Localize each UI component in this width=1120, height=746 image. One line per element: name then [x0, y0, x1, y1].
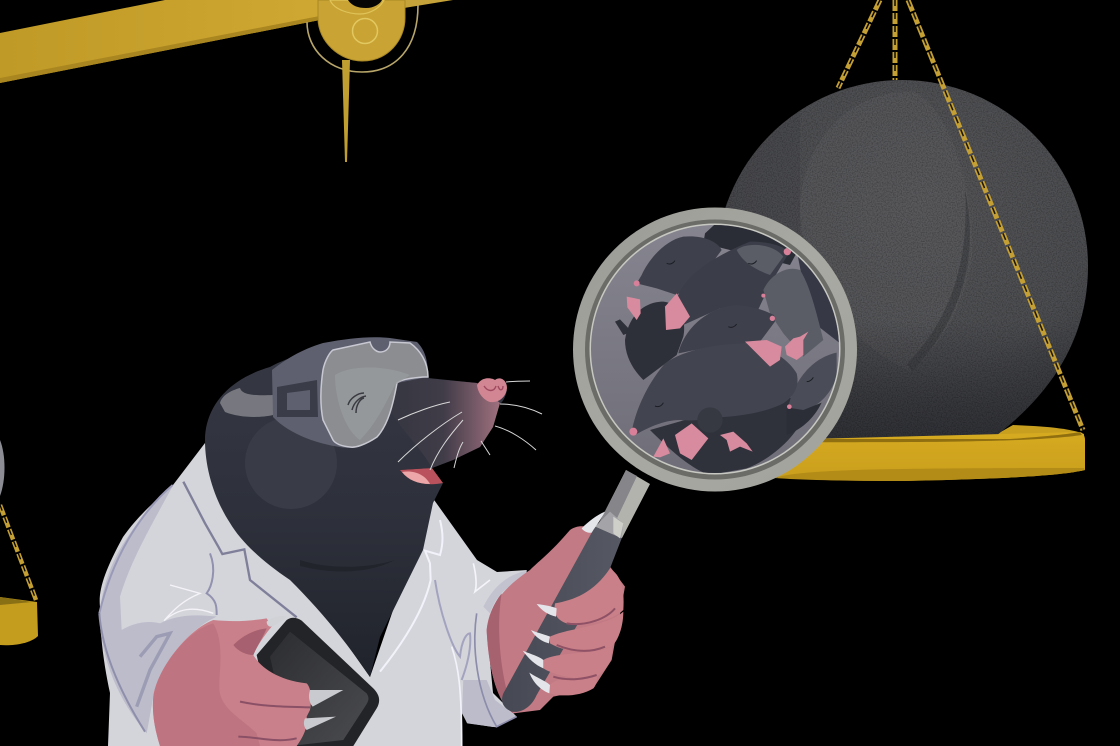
right scale chains	[838, 0, 895, 88]
iron weight ball	[725, 80, 1088, 438]
pivot plate	[318, 0, 405, 61]
ball lower shadow	[826, 348, 1056, 438]
magnifier hand claws	[523, 512, 605, 693]
scale beam and pivot	[0, 0, 453, 162]
goggle straps on frame	[277, 380, 318, 417]
beam	[0, 0, 330, 83]
phone	[257, 618, 379, 746]
lens mole noses	[629, 248, 792, 436]
needle	[342, 60, 350, 162]
nose	[477, 378, 507, 402]
handle	[502, 527, 622, 712]
coat right side details	[380, 520, 527, 746]
whiskers	[398, 381, 542, 470]
neck fold shadow	[300, 560, 395, 572]
handle collar	[595, 512, 623, 538]
left scale pan and chain	[0, 440, 38, 645]
hand holding magnifier	[487, 512, 625, 713]
arc under pivot	[307, 5, 418, 72]
snout	[387, 378, 500, 468]
mole body and head	[205, 341, 542, 677]
right scale pan	[770, 432, 1085, 481]
goggle lens	[321, 342, 428, 447]
goggles	[220, 337, 428, 448]
magnifier neck	[597, 470, 650, 538]
long right chain	[908, 0, 1083, 430]
open mouth	[400, 468, 443, 484]
lens mole paws	[627, 293, 808, 460]
coat left sleeve shading	[99, 482, 297, 733]
goggle lens reflection	[335, 368, 410, 440]
pivot hole	[330, 0, 384, 14]
ball crescent	[907, 190, 970, 372]
right scale pan back rim	[990, 425, 1084, 440]
ball inner sphere	[800, 92, 972, 372]
lab coat	[99, 443, 527, 746]
palm	[487, 526, 625, 713]
lens mole eyes	[655, 261, 813, 407]
hand holding phone	[153, 616, 343, 746]
eye	[348, 393, 366, 413]
magnifier fingers	[555, 568, 624, 624]
goggle strap loop	[220, 388, 282, 417]
goggle frame	[272, 337, 428, 448]
head highlight	[245, 417, 337, 509]
magnifying glass lens	[573, 208, 857, 492]
phone hand claws	[309, 690, 343, 707]
moles seen through the lens	[615, 223, 840, 475]
